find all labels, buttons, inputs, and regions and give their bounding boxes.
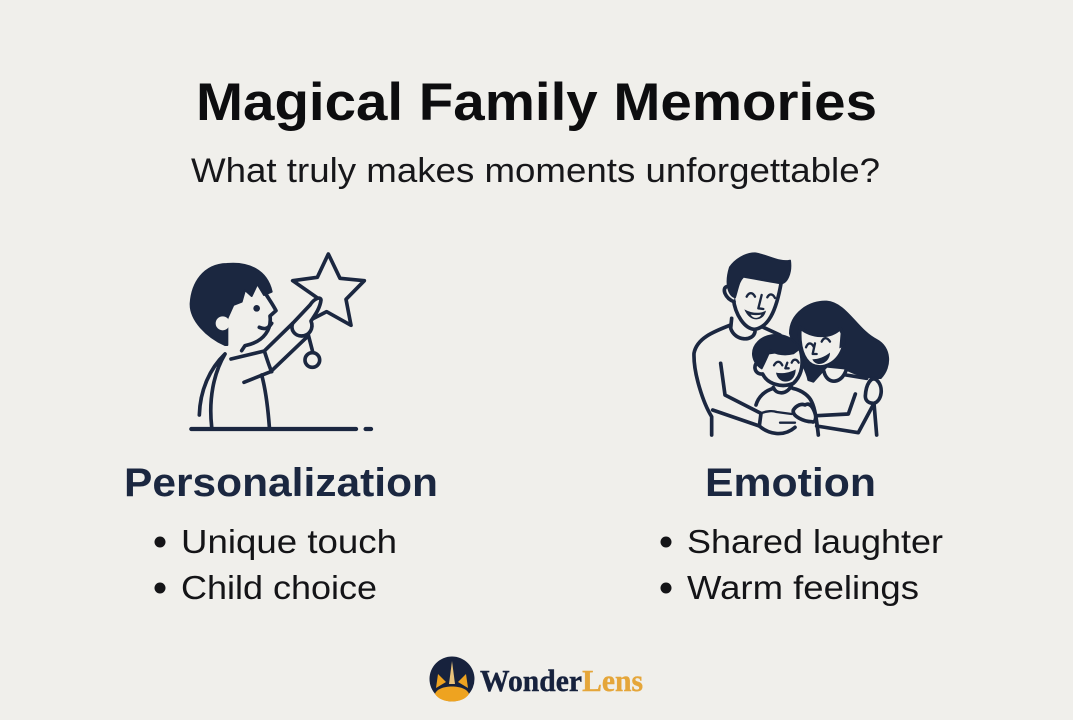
list: Personalization points [154, 524, 397, 607]
wordmark: WonderLens [480, 663, 643, 698]
logo: WonderLens [430, 656, 643, 702]
list: Emotion points: Warm feelings [687, 570, 919, 607]
list: Emotion points: Shared laughter [687, 524, 943, 561]
list: Personalization points: Child choice [181, 570, 377, 607]
heading: Emotion: Emotion [705, 461, 876, 505]
subtitle: What truly makes moments unforgettable? [191, 152, 880, 190]
title: Magical Family Memories [196, 73, 877, 132]
icon: unicorn logo badge [430, 656, 474, 702]
list: Emotion points [660, 524, 943, 607]
list: Personalization points: Unique touch [181, 524, 397, 561]
icon: happy family hugging [694, 253, 888, 435]
icon: child reaching for star [191, 254, 371, 429]
heading: Personalization: Personalization [124, 461, 438, 505]
